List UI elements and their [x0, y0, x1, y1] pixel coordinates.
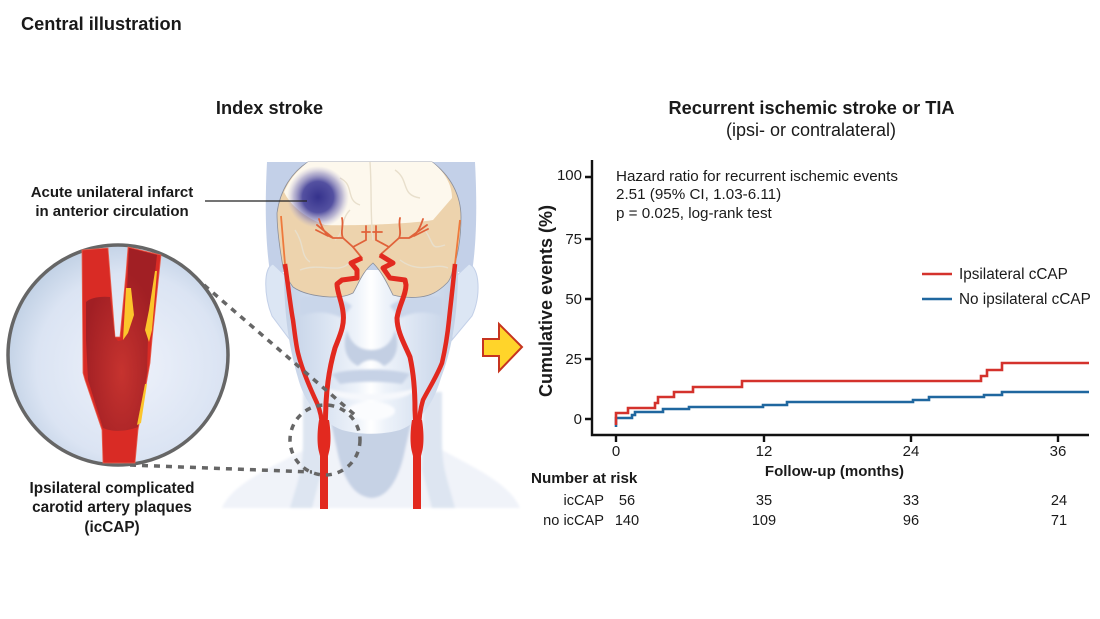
artery wall [82, 247, 161, 463]
heading: recurrent stroke: (ipsi- or contralateral) [726, 120, 896, 140]
heading: recurrent stroke [668, 98, 955, 140]
legend: No ipsilateral cCAP [959, 291, 1091, 308]
label: plaques [30, 480, 194, 536]
y tick labels: 0 [574, 411, 582, 428]
heading: recurrent stroke: Recurrent ischemic stroke or TIA [668, 98, 955, 118]
infarct [287, 166, 349, 228]
ears [266, 264, 290, 340]
plaques [123, 288, 134, 340]
y tick labels: 100 [557, 167, 582, 184]
dashed callout connectors [130, 285, 360, 475]
table: number at risk: 56 [619, 493, 635, 509]
axes [585, 160, 1089, 442]
hazard annotation: Hazard ratio for recurrent ischemic events [616, 168, 898, 185]
label: infarct: in anterior circulation [35, 203, 189, 220]
x tick labels: 36 [1050, 443, 1066, 460]
y tick labels: 25 [565, 351, 582, 368]
brain [277, 162, 461, 297]
artery lumen [86, 248, 157, 431]
x tick labels: 12 [756, 443, 772, 460]
table: number at risk: 96 [903, 513, 919, 529]
title: Central illustration [21, 14, 182, 34]
label: plaques: (icCAP) [84, 519, 140, 536]
heading: index stroke: Index stroke [216, 98, 323, 118]
table: number at risk: 71 [1051, 513, 1067, 529]
legend: Ipsilateral cCAP [959, 266, 1068, 283]
outer arteries [281, 216, 460, 264]
x tick labels: 0 [612, 443, 620, 460]
chart: cumulative events [536, 160, 1091, 480]
y axis title: Cumulative events (%) [536, 205, 556, 397]
y tick labels [557, 167, 582, 428]
hazard annotation: p = 0.025, log-rank test [616, 205, 773, 222]
illustration: head with arteries [222, 162, 520, 509]
table: number at risk: 109 [752, 513, 776, 529]
icon: magnified carotid bifurcation [8, 245, 228, 465]
label: plaques: carotid artery plaques [32, 499, 192, 516]
carotid bulbs and common trunks [318, 420, 330, 509]
internal carotid arteries [325, 258, 362, 430]
face [284, 270, 458, 434]
middle cerebral branches [316, 218, 428, 258]
legend [922, 266, 1091, 308]
hazard annotation: 2.51 (95% CI, 1.03-6.11) [616, 186, 781, 203]
x axis title: Follow-up (months) [765, 463, 904, 480]
table: number at risk: 24 [1051, 493, 1067, 509]
table: number at risk: no icCAP [543, 513, 604, 529]
arrow [483, 324, 522, 371]
table: number at risk: Number at risk [531, 470, 638, 487]
hazard annotation [616, 168, 898, 222]
table: number at risk: icCAP [563, 493, 604, 509]
shoulders and neck [222, 392, 520, 508]
table: number at risk: 35 [756, 493, 772, 509]
table: number at risk [531, 470, 1067, 529]
red curve [616, 363, 1089, 425]
head sides [266, 162, 476, 272]
y tick labels: 75 [565, 231, 582, 248]
label: plaques: Ipsilateral complicated [30, 480, 194, 497]
label: infarct [31, 184, 193, 220]
label: infarct: Acute unilateral infarct [31, 184, 193, 201]
blue curve [616, 392, 1089, 427]
table: number at risk: 33 [903, 493, 919, 509]
table: number at risk: 140 [615, 513, 639, 529]
leader line [205, 200, 307, 202]
y tick labels: 50 [565, 291, 582, 308]
facial shading [300, 295, 442, 420]
x tick labels [612, 443, 1066, 460]
x tick labels: 24 [903, 443, 919, 460]
